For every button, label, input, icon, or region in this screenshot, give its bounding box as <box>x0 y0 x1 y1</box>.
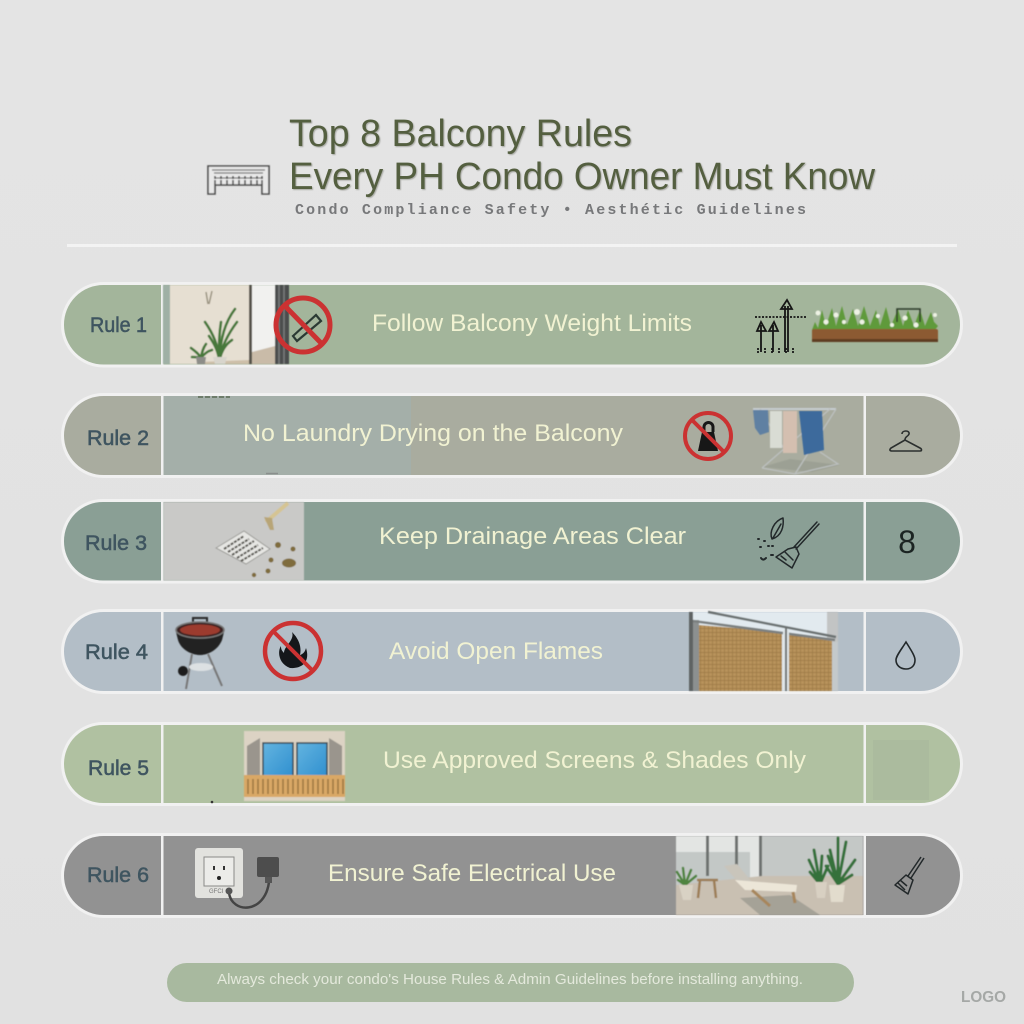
panel: rule 6 <box>62 834 962 916</box>
rule 6 label: Rule 6 <box>87 863 149 887</box>
number 8: 8 <box>898 524 916 560</box>
logo: LOGO <box>961 989 1006 1006</box>
rule 1 text: Follow Balcony Weight Limits <box>372 310 692 337</box>
icon: planter box <box>812 306 938 342</box>
icon: broom and leaf <box>758 518 819 568</box>
rule 5 label: Rule 5 <box>88 756 149 780</box>
panel: rule 3 <box>62 500 962 582</box>
faint placeholder square <box>873 740 929 800</box>
title: Every PH Condo Owner Must Know <box>289 156 876 198</box>
icon: wall outlet and plug: GFCI <box>209 889 224 895</box>
subtitle: Condo Compliance Safety • Aesthétic Guidelines <box>295 202 806 219</box>
rule 1 photo: plant by a door <box>163 285 289 364</box>
rule 1 label: Rule 1 <box>90 313 147 337</box>
rule 3 label: Rule 3 <box>85 531 147 555</box>
header icon: balcony railing <box>208 166 269 194</box>
panel: rule 1 <box>62 284 962 366</box>
rule 3 text: Keep Drainage Areas Clear <box>379 523 686 550</box>
icon: water drop <box>896 642 915 669</box>
title <box>289 113 876 198</box>
icon: no heavy weight sign <box>685 413 731 459</box>
icon: wall outlet and plug <box>195 848 279 908</box>
icon: no smoking sign <box>276 298 330 352</box>
icon: charcoal grill <box>176 618 224 689</box>
panel: rule 5 <box>62 724 962 804</box>
rule 4 label: Rule 4 <box>85 640 148 664</box>
panel: rule 2 <box>62 394 962 476</box>
rule 4 photo: bamboo screen on balcony <box>689 612 838 691</box>
rule 4 text: Avoid Open Flames <box>389 638 603 665</box>
rule 2 text: No Laundry Drying on the Balcony <box>243 420 624 447</box>
icon: upward weight arrows <box>755 300 806 352</box>
icon: hand broom <box>895 857 924 894</box>
rule 6 text: Ensure Safe Electrical Use <box>328 860 616 887</box>
title: Top 8 Balcony Rules <box>289 113 632 155</box>
rule 6 photo: balcony lounge with plants <box>676 836 863 915</box>
rule 3 photo: floor drain with debris <box>164 502 304 580</box>
icon: hanger <box>890 431 922 451</box>
rule 5 text: Use Approved Screens & Shades Only <box>383 747 807 774</box>
rule 5 illustration: balcony with glass doors <box>244 731 345 801</box>
rule 2 tinted band <box>163 396 411 475</box>
panel: rule 4 <box>62 610 962 692</box>
rule 2 label: Rule 2 <box>87 426 149 450</box>
footer note <box>167 963 854 1002</box>
drying rack photo <box>753 409 840 474</box>
icon: no flames sign <box>265 623 321 679</box>
footer note: Always check your condo's House Rules & Admin Guidelines before installing anything. <box>217 971 803 988</box>
